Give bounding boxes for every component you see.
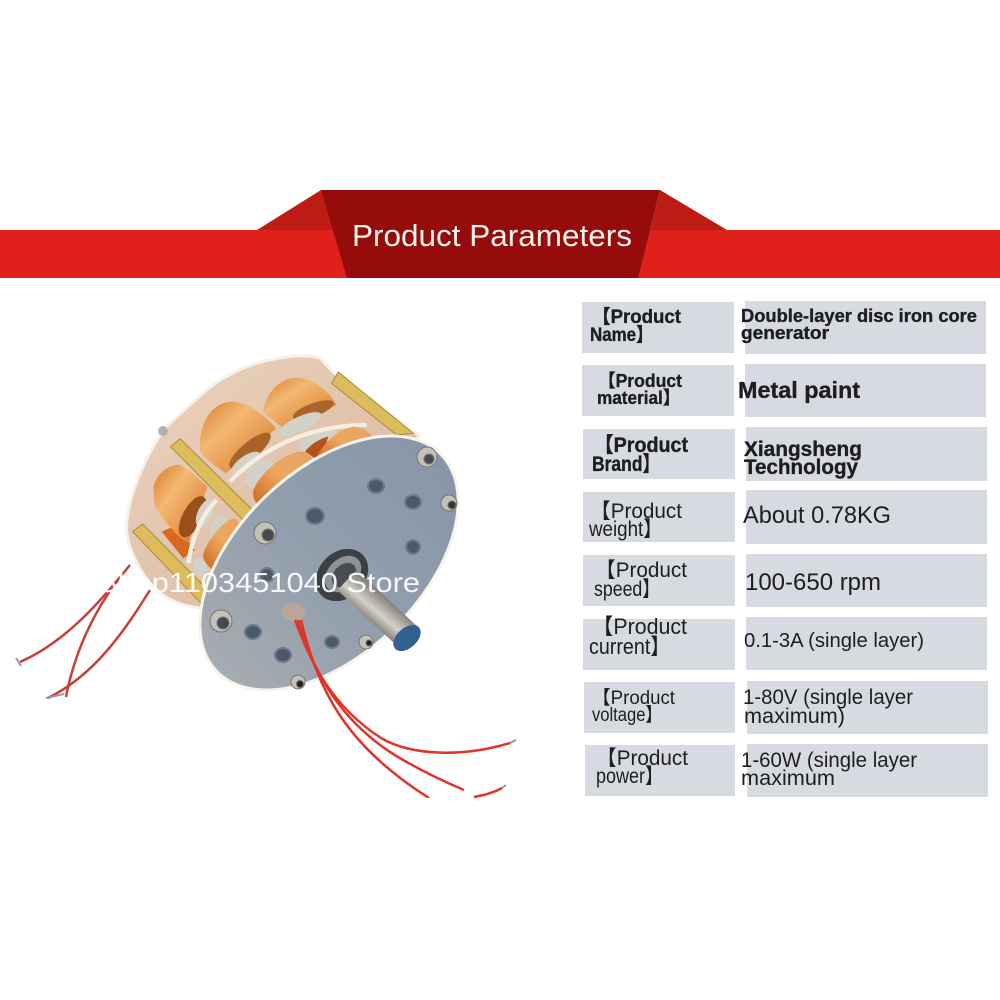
row: material: material】 <box>597 388 680 408</box>
row: brand: Technology <box>744 456 858 479</box>
wire exit patch <box>281 603 305 621</box>
coil lower <box>153 465 207 543</box>
row: voltage <box>584 681 988 734</box>
row: name: Name】 <box>590 324 653 346</box>
row: current: current】 <box>589 634 670 659</box>
coil lower winding <box>173 492 212 541</box>
coil lower dark wedge <box>162 525 195 558</box>
row: power: power】 <box>596 765 663 788</box>
row: material: 【Product <box>598 371 682 391</box>
row: voltage: maximum) <box>744 705 845 728</box>
coil far right shadow <box>305 437 328 462</box>
coil upper <box>200 402 276 473</box>
right wing <box>650 190 727 230</box>
row: voltage: 【Product <box>592 687 676 709</box>
row: brand <box>583 427 987 481</box>
coil upper winding <box>225 427 275 474</box>
row: weight <box>583 490 987 544</box>
product photo: generator <box>16 356 516 798</box>
banner <box>0 190 1000 278</box>
row: speed <box>583 554 987 607</box>
center plate <box>321 190 660 278</box>
motor interior <box>133 372 413 608</box>
spec table <box>582 301 988 797</box>
shaft <box>347 580 407 636</box>
row: name: generator <box>741 323 829 343</box>
row: speed: speed】 <box>594 578 660 601</box>
row: power <box>585 744 988 797</box>
row: current <box>583 614 987 670</box>
infographic canvas <box>0 190 1000 798</box>
middle disc rim <box>188 425 367 563</box>
row: current: 0.1-3A (single layer) <box>744 630 924 652</box>
stud on rear disc <box>158 426 168 436</box>
ribbon band <box>0 230 1000 278</box>
row: voltage: 1-80V (single layer <box>743 686 913 709</box>
corner bolts <box>210 447 457 689</box>
rear disc <box>127 356 420 610</box>
row: brand: 【Product <box>594 434 688 457</box>
row: weight: 【Product <box>590 500 682 523</box>
row: name: 【Product <box>592 306 682 328</box>
row: name: Double-layer disc iron core <box>741 306 977 326</box>
row: speed: 【Product <box>595 559 687 582</box>
shaft end <box>388 620 426 656</box>
row: material: Metal paint <box>738 377 860 403</box>
coil middle <box>253 452 315 510</box>
rear wires <box>20 565 150 698</box>
front disc <box>153 388 505 738</box>
row: brand: Xiangsheng <box>744 438 862 461</box>
row: weight: weight】 <box>588 518 662 541</box>
front wires <box>295 620 510 798</box>
row: voltage: voltage】 <box>592 704 662 726</box>
row: speed: 100-650 rpm <box>745 569 881 596</box>
coil lower front <box>203 518 244 572</box>
row: weight: About 0.78KG <box>743 502 891 529</box>
row: material <box>582 364 986 417</box>
row: power: 1-60W (single layer <box>741 749 917 772</box>
left wing <box>257 190 335 230</box>
coil top rear winding <box>291 396 336 424</box>
bearing <box>305 538 379 612</box>
magnets <box>192 407 338 576</box>
title: Product Parameters <box>352 218 632 253</box>
wire tips <box>16 658 516 788</box>
row: current: 【Product <box>592 614 687 639</box>
store watermark: Shop1103451040 Store <box>97 567 420 598</box>
row: brand: Brand】 <box>592 453 660 476</box>
coil top rear <box>263 378 337 428</box>
row: name <box>582 301 986 354</box>
coil far right <box>317 427 372 462</box>
brass bars <box>133 372 413 608</box>
row: power: 【Product <box>596 747 688 770</box>
row: power: maximum <box>741 767 835 790</box>
recessed screws <box>245 479 421 662</box>
